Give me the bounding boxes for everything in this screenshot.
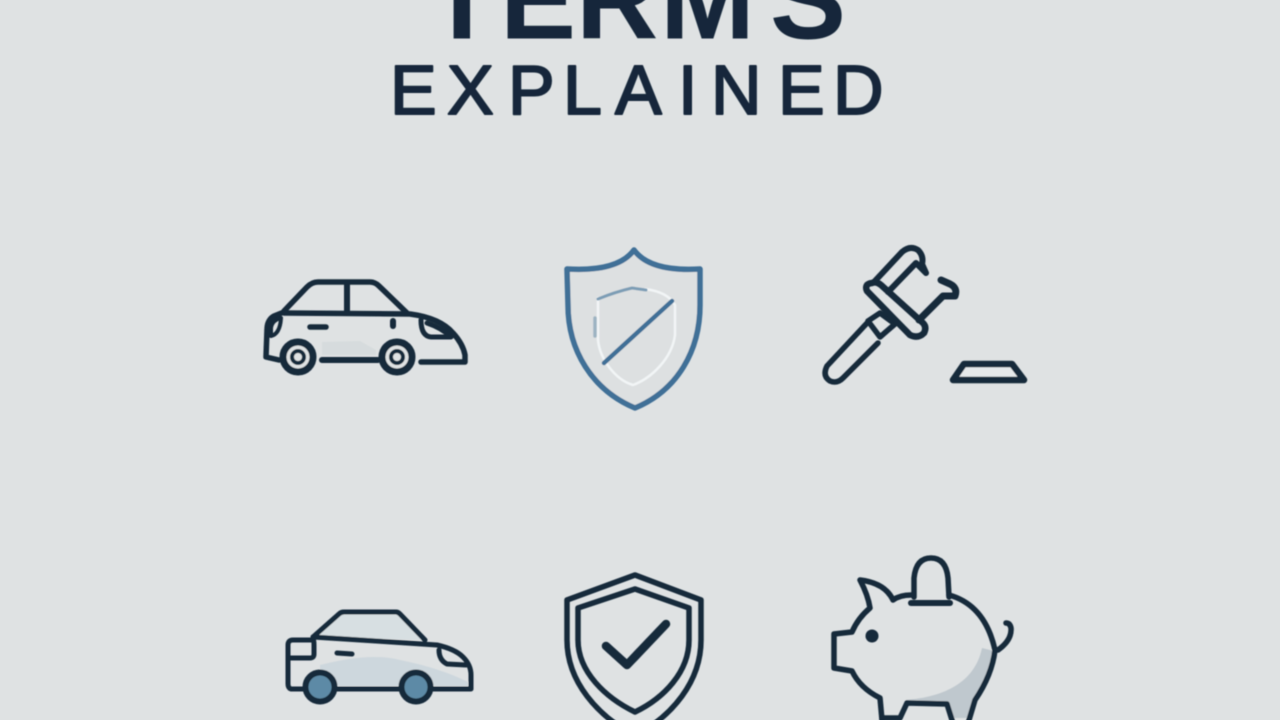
icon: blue shield	[567, 250, 700, 408]
title	[390, 0, 884, 129]
icon: gavel	[825, 248, 1024, 382]
heading: explained: EXPLAINED	[390, 51, 884, 129]
icon: car outline	[266, 282, 465, 372]
icon: piggy bank	[834, 558, 1011, 720]
icon: shield with check	[567, 575, 701, 720]
icon: car with blue wheels	[288, 612, 471, 702]
